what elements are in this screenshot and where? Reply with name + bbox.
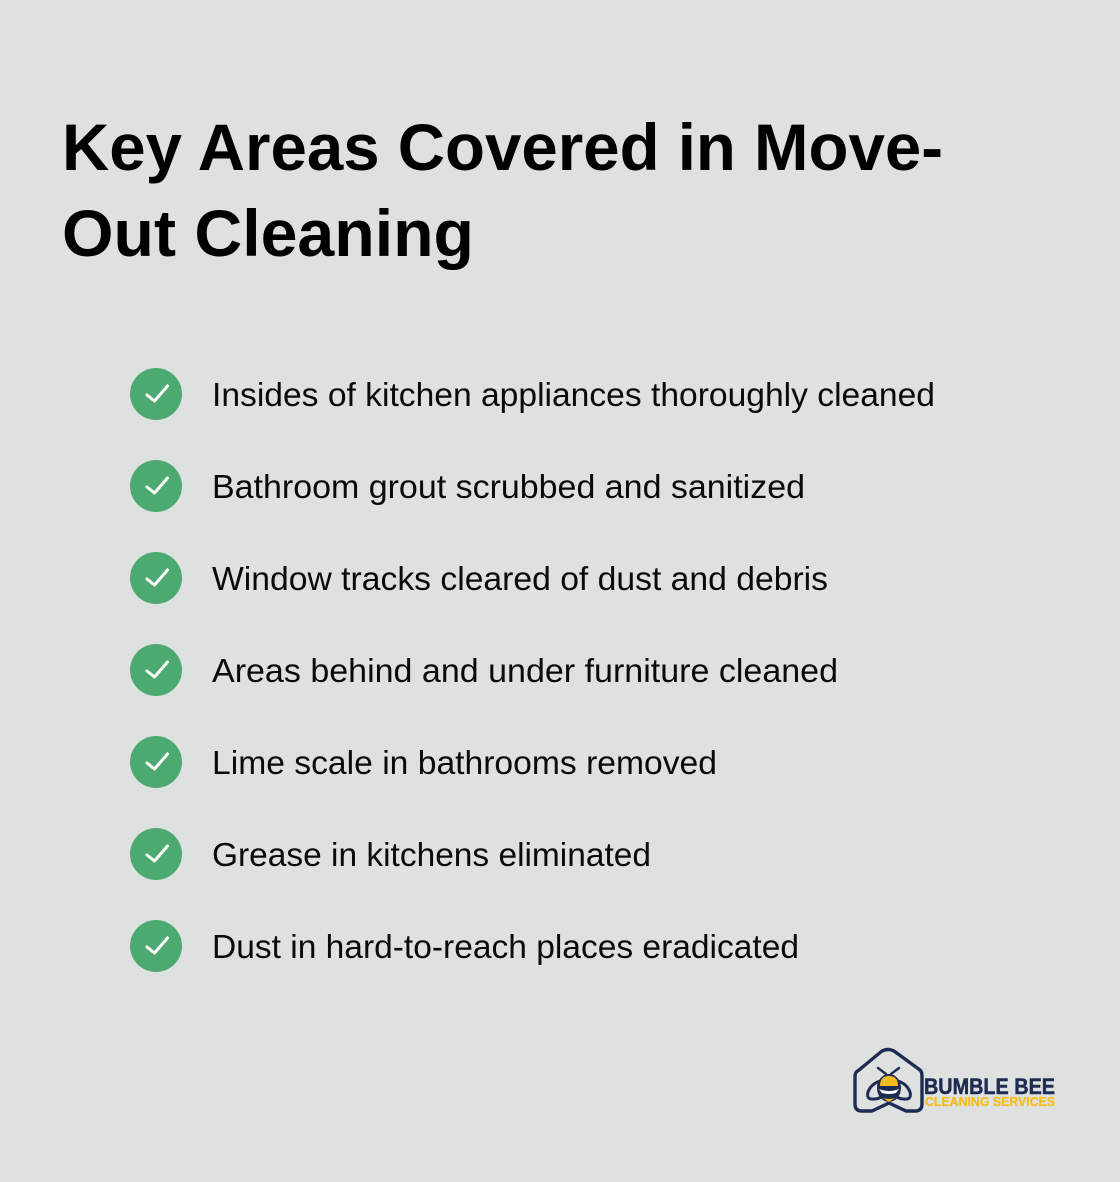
item: grease: Grease in kitchens eliminated bbox=[212, 836, 651, 873]
item: lime scale bbox=[130, 736, 717, 788]
item: bathroom grout: Bathroom grout scrubbed and sanitized bbox=[212, 468, 805, 505]
logo: Bumble Bee Cleaning Services bbox=[855, 1050, 1055, 1111]
item: lime scale: Lime scale in bathrooms removed bbox=[212, 744, 717, 781]
item: window tracks: Window tracks cleared of dust and debris bbox=[212, 560, 828, 597]
title: Out Cleaning bbox=[62, 196, 474, 270]
item: window tracks bbox=[130, 552, 828, 604]
item: behind furniture: Areas behind and under furniture cleaned bbox=[212, 652, 838, 689]
icon: house with bee bbox=[855, 1050, 922, 1111]
item: dust bbox=[130, 920, 799, 972]
title bbox=[62, 110, 943, 270]
item: kitchen appliances bbox=[130, 368, 935, 420]
logo tagline: CLEANING SERVICES bbox=[925, 1094, 1055, 1109]
item: dust: Dust in hard-to-reach places eradicated bbox=[212, 928, 799, 965]
title: Key Areas Covered in Move- bbox=[62, 110, 943, 184]
item: grease bbox=[130, 828, 651, 880]
checklist bbox=[130, 368, 935, 972]
item: kitchen appliances: Insides of kitchen appliances thoroughly cleaned bbox=[212, 376, 935, 413]
item: behind furniture bbox=[130, 644, 838, 696]
item: bathroom grout bbox=[130, 460, 805, 512]
logo wordmark: BUMBLE BEE bbox=[924, 1074, 1055, 1099]
